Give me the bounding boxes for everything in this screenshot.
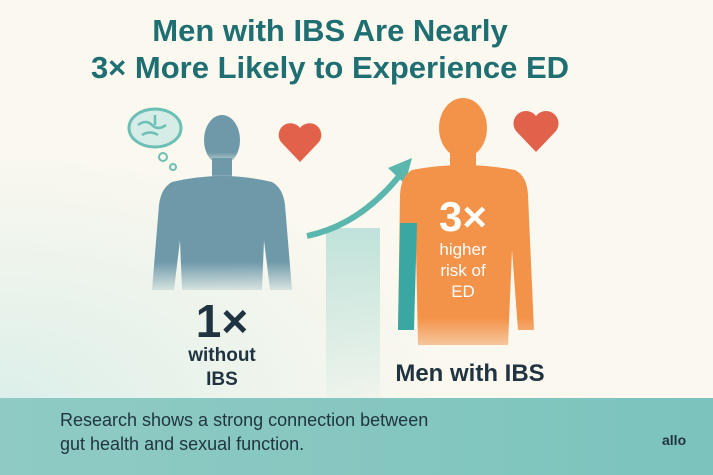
- footer band: [0, 398, 713, 475]
- stat: 3x: 3×: [439, 193, 487, 240]
- icon: heart right: [514, 111, 558, 152]
- title: Men with IBS Are Nearly: [152, 13, 508, 48]
- logo: allo: [662, 432, 686, 448]
- arrow: [307, 158, 412, 236]
- stat: 1x: [188, 295, 256, 390]
- title: 3× More Likely to Experience ED: [91, 50, 569, 85]
- stat: 3x: [439, 193, 487, 301]
- footer text: [60, 410, 428, 454]
- bar: [326, 228, 380, 400]
- person: without IBS: [152, 115, 292, 290]
- label: men with IBS: Men with IBS: [395, 360, 545, 387]
- icon: brain thought: [129, 109, 181, 170]
- stat: 1x: 1×: [196, 295, 248, 347]
- stat: 1x: IBS: [206, 369, 238, 390]
- person: with IBS: [398, 98, 534, 345]
- footer text: Research shows a strong connection between: [60, 410, 428, 430]
- stat: 3x: ED: [451, 282, 475, 301]
- stat: 3x: higher: [439, 240, 487, 259]
- stat: 3x: risk of: [440, 261, 486, 280]
- icon: heart left: [279, 123, 321, 162]
- footer text: gut health and sexual function.: [60, 434, 304, 454]
- title: [91, 13, 569, 85]
- stat: 1x: without: [188, 345, 256, 366]
